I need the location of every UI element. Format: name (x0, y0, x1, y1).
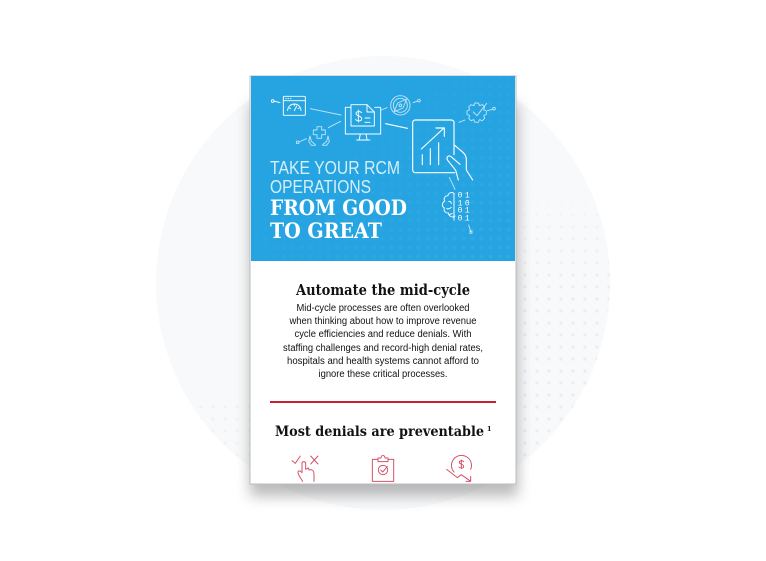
icons row (292, 455, 471, 481)
title (270, 158, 407, 243)
icon: browser gauge (271, 96, 341, 115)
icon: brain with binary: 01 (458, 191, 470, 200)
icon: brain with binary: 01 (458, 207, 470, 216)
icon: compass (381, 96, 420, 115)
heading: most denials are preventable: 1 (487, 425, 492, 433)
icon: monitor with invoice (345, 105, 381, 140)
card shadow (250, 104, 518, 496)
title: TAKE YOUR RCM (270, 158, 400, 178)
icon: brain with binary (442, 177, 472, 233)
icon: dollar with down arrow (447, 455, 471, 481)
icon: brain with binary: 01 (458, 214, 470, 223)
intro text block: staffing challenges and record-high denial rates, (283, 343, 483, 354)
document card (250, 76, 516, 484)
heading: most denials are preventable: Most denials are preventable (275, 424, 484, 440)
intro text block: hospitals and health systems cannot afford to (287, 356, 479, 367)
icon: health hands (296, 121, 341, 145)
intro text block: Mid-cycle processes are often overlooked (296, 303, 470, 314)
title: OPERATIONS (270, 177, 371, 197)
icon: gear check (459, 103, 495, 122)
panel: blue header (251, 76, 515, 261)
icon: clipboard with check (372, 455, 394, 481)
header icons (271, 96, 495, 233)
red divider (270, 401, 496, 403)
icon: brain with binary: 10 (458, 199, 470, 208)
title: TO GREAT (270, 218, 382, 243)
intro text block: when thinking about how to improve revenue (289, 316, 477, 327)
icon: tablet with chart (386, 120, 473, 180)
intro text block: cycle efficiencies and reduce denials. With (294, 329, 472, 340)
background circle (200, 190, 610, 466)
infographic preview (200, 76, 610, 510)
intro text block (283, 303, 483, 380)
icon: hand with check and cross (292, 456, 318, 481)
intro text block: ignore these critical processes. (318, 369, 448, 380)
heading: automate the mid-cycle: Automate the mid-cycle (295, 281, 470, 299)
title: FROM GOOD (270, 195, 407, 220)
